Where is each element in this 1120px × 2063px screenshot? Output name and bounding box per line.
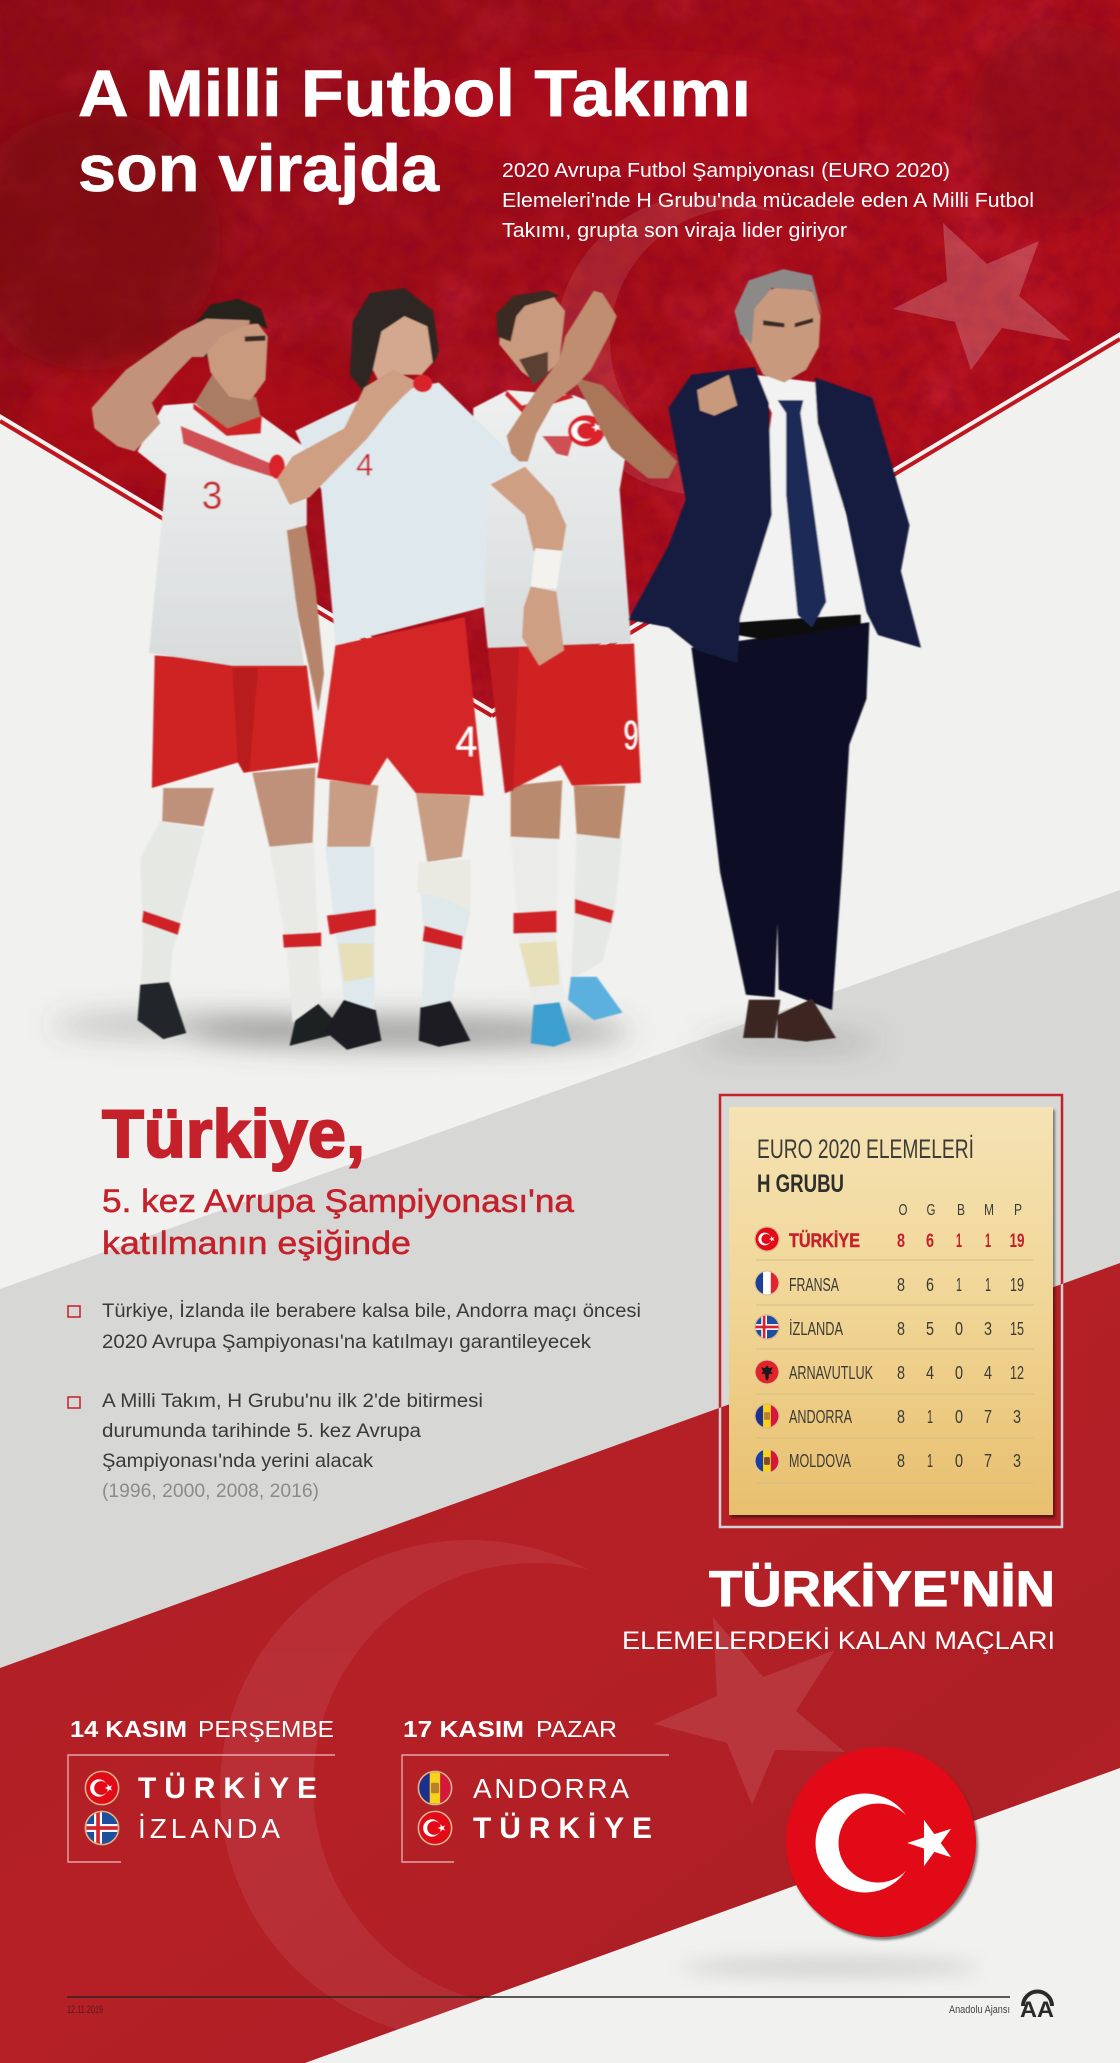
intro text: Elemeleri'nde H Grubu'nda mücadele eden A Milli Futbol bbox=[502, 190, 1034, 212]
row: Moldova: MOLDOVA bbox=[789, 1451, 851, 1471]
players and coach illustration bbox=[92, 269, 921, 1050]
row: Arnavutluk: 8 bbox=[897, 1363, 905, 1383]
row: Türkiye: 8 bbox=[897, 1231, 905, 1252]
player 4 bbox=[277, 288, 566, 1050]
row: Fransa: 8 bbox=[897, 1275, 905, 1295]
row: Andorra: ANDORRA bbox=[789, 1407, 852, 1427]
footer: 12.11.2019 bbox=[67, 2004, 103, 2016]
row: Fransa: 1 bbox=[985, 1275, 991, 1295]
row: Fransa: 6 bbox=[926, 1275, 934, 1295]
row: İzlanda: 3 bbox=[984, 1319, 992, 1339]
row: Fransa: 1 bbox=[956, 1275, 962, 1295]
match card: 14 Kasım: 14 KASIM bbox=[70, 1716, 187, 1742]
table column headers: M bbox=[984, 1202, 994, 1219]
row: Fransa: FRANSA bbox=[789, 1275, 839, 1295]
row: Arnavutluk: 12 bbox=[1010, 1363, 1024, 1383]
player 4: 4 bbox=[356, 448, 373, 483]
row: Moldova: 8 bbox=[897, 1451, 905, 1471]
row: Moldova: 0 bbox=[955, 1451, 963, 1471]
footer bbox=[67, 1992, 1054, 2022]
row: Fransa: 19 bbox=[1010, 1275, 1024, 1295]
heading: Türkiye: Türkiye, bbox=[102, 1096, 365, 1172]
title: A Milli Futbol Takımı bbox=[78, 56, 751, 130]
subheading: katılmanın eşiğinde bbox=[102, 1225, 411, 1261]
bullet 2: (1996, 2000, 2008, 2016) bbox=[102, 1481, 319, 1502]
player 3: 3 bbox=[202, 474, 222, 517]
footer: Anadolu Ajansı bbox=[949, 2004, 1010, 2016]
icon: Turkish flag badge bbox=[680, 1747, 980, 1976]
row: Arnavutluk: ARNAVUTLUK bbox=[789, 1363, 873, 1383]
row: Türkiye: 1 bbox=[985, 1231, 991, 1252]
bullet 1: Türkiye, İzlanda ile berabere kalsa bile, Andorra maçı öncesi bbox=[102, 1301, 641, 1322]
intro text: 2020 Avrupa Futbol Şampiyonası (EURO 2020) bbox=[502, 160, 950, 182]
row: İzlanda bbox=[755, 1315, 1024, 1339]
table column headers bbox=[898, 1202, 1022, 1219]
match card: 17 Kasım: ANDORRA bbox=[473, 1773, 629, 1804]
row: İzlanda: 8 bbox=[897, 1319, 905, 1339]
row: Andorra bbox=[755, 1404, 1021, 1428]
row: Andorra: 8 bbox=[897, 1407, 905, 1427]
match card: 14 Kasım: TÜRKİYE bbox=[138, 1772, 317, 1805]
bullet 2: A Milli Takım, H Grubu'nu ilk 2'de bitirmesi bbox=[102, 1391, 483, 1412]
table column headers: P bbox=[1014, 1202, 1022, 1219]
table column headers: O bbox=[898, 1202, 908, 1219]
row: İzlanda: 5 bbox=[926, 1319, 934, 1339]
heading: remaining matches: TÜRKİYE'NİN bbox=[709, 1561, 1055, 1617]
row: Andorra: 1 bbox=[927, 1407, 933, 1427]
row: İzlanda: İZLANDA bbox=[789, 1319, 843, 1339]
standings table: H GRUBU bbox=[757, 1170, 844, 1198]
bullet 2: Şampiyonası'nda yerini alacak bbox=[102, 1451, 374, 1472]
row: İzlanda: 15 bbox=[1010, 1319, 1024, 1339]
row: Türkiye: 6 bbox=[926, 1231, 934, 1252]
row: Andorra: 0 bbox=[955, 1407, 963, 1427]
row: Türkiye: 19 bbox=[1010, 1231, 1024, 1252]
player 9: 9 bbox=[624, 713, 639, 758]
row: Moldova bbox=[755, 1449, 1021, 1473]
row: Türkiye: 1 bbox=[956, 1231, 962, 1252]
subheading: 5. kez Avrupa Şampiyonası'na bbox=[102, 1183, 574, 1219]
decorative chevron lines bbox=[0, 339, 1120, 716]
coach bbox=[628, 269, 921, 1042]
standings table: EURO 2020 ELEMELERİ bbox=[757, 1133, 974, 1164]
row: Arnavutluk: 4 bbox=[984, 1363, 992, 1383]
intro text: Takımı, grupta son viraja lider giriyor bbox=[502, 220, 847, 242]
bullet 2: durumunda tarihinde 5. kez Avrupa bbox=[102, 1421, 421, 1442]
row: Moldova: 1 bbox=[927, 1451, 933, 1471]
player 3 bbox=[92, 299, 337, 1046]
row: Türkiye bbox=[755, 1227, 1024, 1252]
match card: 17 Kasım: TÜRKİYE bbox=[473, 1812, 652, 1845]
bullet 2 bbox=[68, 1391, 483, 1502]
row: Arnavutluk bbox=[755, 1360, 1024, 1384]
subheading bbox=[102, 1183, 574, 1261]
match card: 17 Kasım: PAZAR bbox=[536, 1716, 617, 1742]
match card: 14 Kasım bbox=[68, 1716, 335, 1862]
player 9 bbox=[473, 291, 677, 1047]
title bbox=[78, 56, 751, 205]
intro text bbox=[502, 160, 1034, 242]
table column headers: G bbox=[926, 1202, 936, 1219]
row: Moldova: 7 bbox=[984, 1451, 992, 1471]
bullet 1 bbox=[68, 1301, 641, 1353]
row: Arnavutluk: 4 bbox=[926, 1363, 934, 1383]
match card: 17 Kasım bbox=[402, 1716, 669, 1862]
match card: 14 Kasım: İZLANDA bbox=[138, 1813, 280, 1844]
panel: red crowd background bbox=[0, 0, 1120, 720]
panel: gray band bbox=[0, 890, 1120, 1668]
match card: 14 Kasım: PERŞEMBE bbox=[198, 1716, 334, 1742]
panel: red band bbox=[0, 1250, 1120, 2063]
standings table bbox=[720, 1095, 1062, 1527]
match card: 17 Kasım: 17 KASIM bbox=[403, 1716, 524, 1742]
table column headers: B bbox=[957, 1202, 965, 1219]
heading: remaining matches bbox=[622, 1561, 1055, 1655]
row: Türkiye: TÜRKİYE bbox=[789, 1231, 860, 1252]
row: Moldova: 3 bbox=[1013, 1451, 1021, 1471]
title: son virajda bbox=[78, 131, 440, 205]
player 4: 4 bbox=[455, 717, 477, 765]
icon: AA logo: AA bbox=[1020, 1997, 1054, 2022]
row: Fransa bbox=[755, 1271, 1024, 1295]
bullet 1: 2020 Avrupa Şampiyonası'na katılmayı garantileyecek bbox=[102, 1332, 592, 1353]
floor shadow under figures bbox=[50, 1014, 880, 1049]
row: Arnavutluk: 0 bbox=[955, 1363, 963, 1383]
row: İzlanda: 0 bbox=[955, 1319, 963, 1339]
row: Andorra: 3 bbox=[1013, 1407, 1021, 1427]
row: Andorra: 7 bbox=[984, 1407, 992, 1427]
heading: remaining matches: ELEMELERDEKİ KALAN MAÇLARI bbox=[622, 1626, 1055, 1655]
